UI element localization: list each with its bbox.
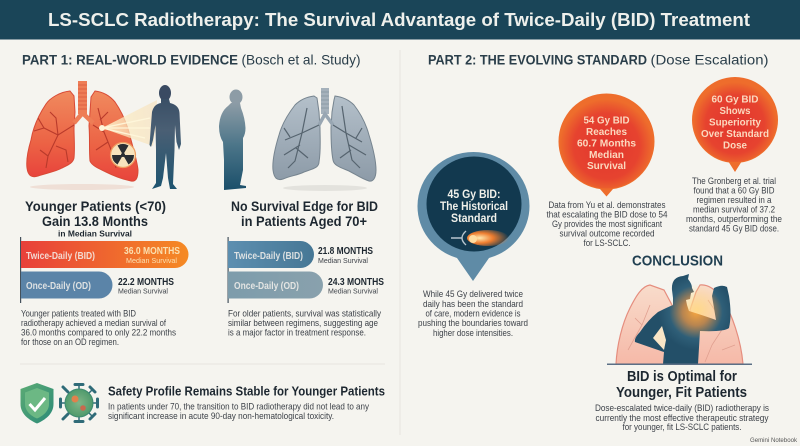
text block: currently the most effective therapeutic strategy <box>596 412 769 423</box>
icon: grey lungs <box>273 88 376 191</box>
text block <box>595 402 769 432</box>
text block: 45 Gy <box>418 288 528 338</box>
headline: in Median Survival <box>58 228 132 238</box>
bar: once-daily: Median Survival <box>118 286 168 296</box>
text block: 60 Gy <box>686 175 782 234</box>
text block: For older patients, survival was statistically <box>228 308 381 318</box>
text block: 60 Gy: months, outperforming the <box>686 213 782 224</box>
panel: conclusion <box>595 252 769 432</box>
text block: 54 Gy: that escalating the BID dose to 54 <box>546 208 668 220</box>
panel: safety profile <box>20 383 385 424</box>
header band <box>0 0 800 40</box>
bar: twice-daily <box>21 241 188 268</box>
text block: In patients under 70, the transition to BID radiotherapy did not lead to any <box>108 400 369 412</box>
icon: radiation beam <box>451 230 509 246</box>
panel: 54 Gy bubble: Survival <box>587 160 626 172</box>
text block: similar between regimens, suggesting age <box>228 317 378 328</box>
bar: once-daily: 24.3 MONTHS <box>328 276 384 288</box>
text block <box>108 400 369 421</box>
text block: radiotherapy achieved a median survival of <box>21 317 166 328</box>
heading: part 2: PART 2: THE EVOLVING STANDARD(Dose Escalation) <box>428 52 768 68</box>
bar: once-daily: Once-Daily (OD) <box>234 280 299 292</box>
icon: older person silhouette <box>219 90 246 190</box>
panel: 45 Gy bubble: Standard <box>451 213 497 225</box>
text block: 54 Gy: survival outcome recorded <box>560 228 654 238</box>
bar: twice-daily: Median Survival <box>126 256 177 265</box>
heading: CONCLUSION <box>632 252 723 270</box>
text block: 60 Gy: regimen resulted in a <box>696 194 772 205</box>
headline: in Patients Aged 70+ <box>241 213 367 229</box>
icon: young person silhouette <box>150 85 181 189</box>
text block: 60 Gy: median survival of 37.2 <box>693 204 775 214</box>
text block: 60 Gy: standard 45 Gy BID dose. <box>689 222 779 234</box>
text block: 45 Gy: higher dose intensities. <box>433 327 513 338</box>
panel: 54 Gy bubble <box>558 94 654 196</box>
bar: once-daily <box>21 272 174 298</box>
headline: BID is Optimal for <box>627 369 737 385</box>
bar: twice-daily: 36.0 MONTHS <box>124 245 180 257</box>
text block: 54 Gy: Gy provides the most significant <box>552 218 662 229</box>
panel: 60 Gy bubble: Shows <box>720 105 751 117</box>
watermark: Gemini Notebook <box>750 438 798 444</box>
panel: 45 Gy bubble: 45 Gy BID: <box>448 189 500 201</box>
bar: twice-daily: Twice-Daily (BID) <box>26 250 95 262</box>
bar: once-daily: 22.2 MONTHS <box>118 276 174 288</box>
heading: Safety Profile Remains Stable for Younger Patients <box>108 384 385 398</box>
headline <box>25 198 166 238</box>
icon: red lungs with radiation <box>27 81 157 190</box>
text block <box>21 308 176 347</box>
icon: shield <box>20 383 54 424</box>
panel: 60 Gy bubble: Dose <box>723 140 747 152</box>
text block: for those on an OD regimen. <box>21 336 119 347</box>
text block: 60 Gy: The Gronberg et al. trial <box>692 175 776 186</box>
panel: 60 Gy bubble: Over Standard <box>701 128 769 140</box>
bar: once-daily <box>228 272 384 298</box>
text block: 45 Gy: pushing the boundaries toward <box>418 317 528 328</box>
bar: twice-daily <box>228 241 373 268</box>
panel: 45 Gy bubble <box>417 152 530 281</box>
headline: Younger, Fit Patients <box>616 385 747 401</box>
headline: No Survival Edge for BID <box>231 198 378 214</box>
text block: 54 Gy: for LS-SCLC. <box>584 237 630 248</box>
headline: Gain 13.8 Months <box>42 213 148 229</box>
panel: 60 Gy bubble: Superiority <box>709 116 761 128</box>
text block: significant increase in acute 90-day non-hematological toxicity. <box>108 410 334 421</box>
bar chart: younger patients <box>20 237 188 303</box>
panel: 54 Gy bubble: 54 Gy BID <box>584 114 630 126</box>
headline: Younger Patients (<70) <box>25 198 166 214</box>
bar: once-daily: Once-Daily (OD) <box>26 280 91 292</box>
text block: 60 Gy: found that a 60 Gy BID <box>694 184 775 196</box>
headline <box>231 198 378 229</box>
text block: 45 Gy: While 45 Gy delivered twice <box>423 288 523 299</box>
text block: 54 Gy <box>546 199 668 248</box>
text block: 45 Gy: of care, modern evidence is <box>426 308 521 318</box>
text block: 54 Gy: Data from Yu et al. demonstrates <box>548 199 666 210</box>
bar chart: older patients <box>228 237 384 303</box>
icon: virus <box>60 384 98 422</box>
text block: 36.0 months compared to only 22.2 months <box>21 326 176 338</box>
panel: 60 Gy bubble: 60 Gy BID <box>712 94 759 106</box>
panel: 54 Gy bubble: Reaches <box>586 126 627 138</box>
text block: for younger, fit LS-SCLC patients. <box>622 421 742 432</box>
bar: twice-daily: Median Survival <box>318 256 368 265</box>
text block: Dose-escalated twice-daily (BID) radiotherapy is <box>595 402 769 413</box>
heading: part 1: PART 1: REAL-WORLD EVIDENCE(Bosch et al. Study) <box>22 52 360 68</box>
bar: twice-daily: 21.8 MONTHS <box>318 245 373 257</box>
text block <box>228 308 381 338</box>
light beams <box>102 100 157 146</box>
panel: younger patients <box>20 81 188 347</box>
text block: 45 Gy: daily has been the standard <box>423 298 523 309</box>
panel: 54 Gy bubble: 60.7 Months <box>577 138 636 150</box>
panel: 45 Gy bubble: The Historical <box>440 201 508 213</box>
icon: flexing figure with lungs <box>607 274 752 365</box>
bar: twice-daily: Twice-Daily (BID) <box>234 250 303 262</box>
panel: older patients <box>219 88 384 338</box>
panel: 54 Gy bubble: Median <box>589 149 624 161</box>
text block: is a major factor in treatment response. <box>228 326 366 338</box>
text block: Younger patients treated with BID <box>21 308 136 318</box>
title: LS-SCLC Radiotherapy: The Survival Advantage of Twice-Daily (BID) Treatment <box>48 9 750 30</box>
panel: 60 Gy bubble <box>692 77 778 172</box>
headline <box>616 369 747 401</box>
bar: once-daily: Median Survival <box>328 286 378 296</box>
